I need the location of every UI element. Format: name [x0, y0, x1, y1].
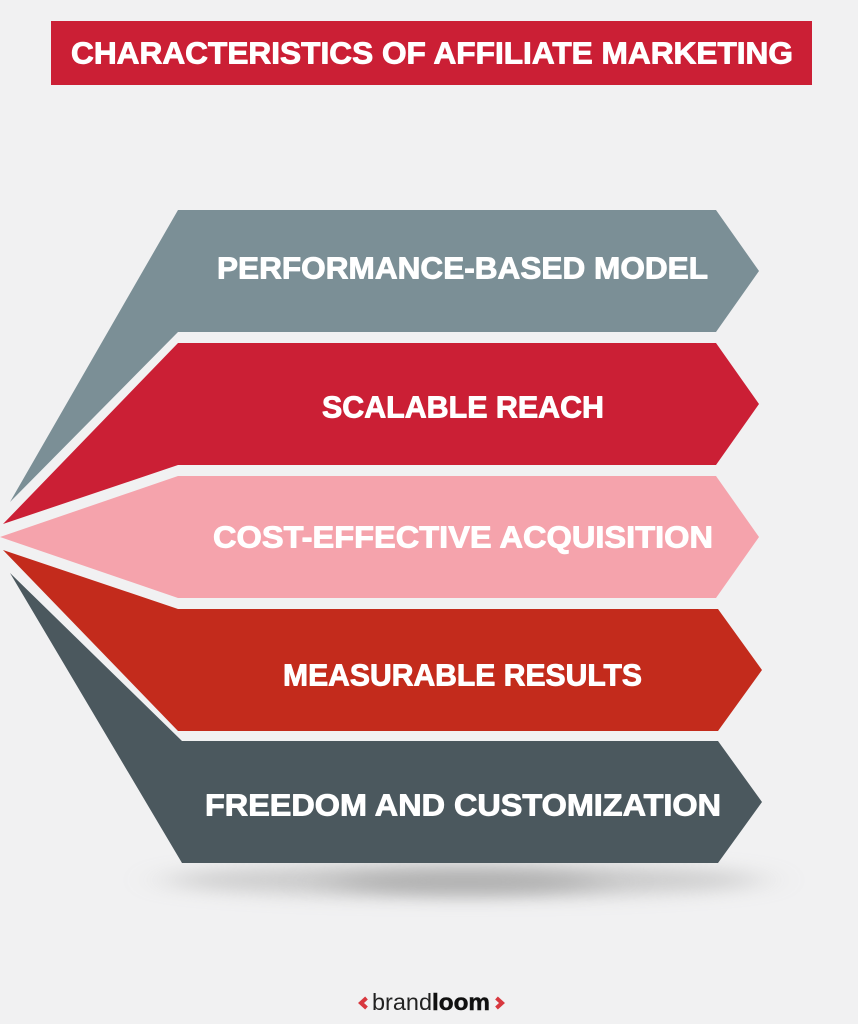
- brandloom logo: loom: [432, 989, 490, 1015]
- brandloom logo: [361, 989, 502, 1015]
- ground shadow: [164, 863, 764, 897]
- arrow: cost-effective acquisition: [0, 476, 759, 598]
- arrow: performance-based model: [10, 210, 759, 502]
- arrow: cost-effective acquisition: COST-EFFECTIVE ACQUISITION: [213, 521, 713, 555]
- arrow: scalable reach: SCALABLE REACH: [322, 391, 604, 425]
- arrow: measurable results: [3, 550, 762, 731]
- arrow: performance-based model: PERFORMANCE-BASED MODEL: [217, 252, 708, 286]
- arrow: freedom and customization: [10, 573, 762, 863]
- brandloom logo: brand: [372, 989, 432, 1015]
- arrow: measurable results: MEASURABLE RESULTS: [283, 659, 642, 693]
- arrow: scalable reach: [3, 343, 759, 524]
- title banner: CHARACTERISTICS OF AFFILIATE MARKETING: [71, 37, 793, 71]
- arrow: freedom and customization: FREEDOM AND CUSTOMIZATION: [205, 788, 721, 822]
- title banner: [51, 21, 812, 85]
